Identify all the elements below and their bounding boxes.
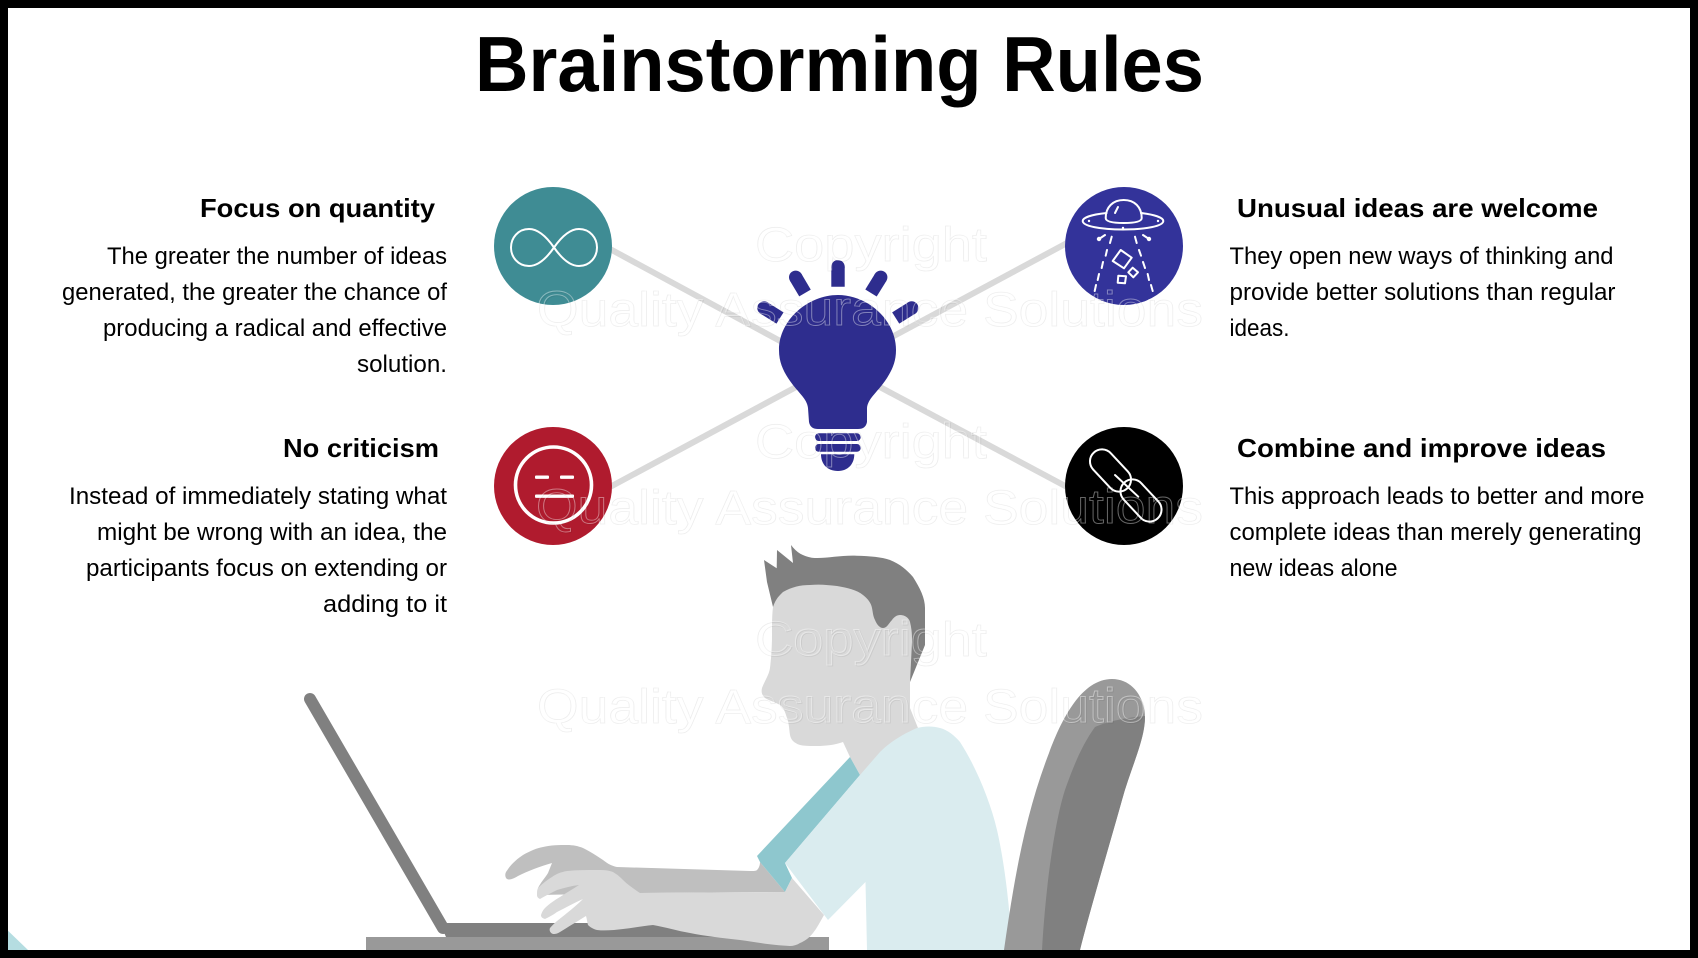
watermark	[536, 218, 1203, 734]
icon: infinity	[494, 187, 612, 305]
text block: combine and improve	[1230, 483, 1644, 582]
heading: focus on quantity: Focus on quantity	[200, 193, 436, 223]
text block: unusual ideas: provide better solutions than regular	[1230, 279, 1616, 306]
heading: no criticism: No criticism	[283, 433, 439, 463]
text block: focus on quantity: solution.	[357, 351, 447, 378]
text block: no criticism: might be wrong with an idea, the	[97, 519, 447, 546]
watermark: Quality Assurance Solutions	[536, 481, 1202, 534]
text block: combine and improve: This approach leads to better and more	[1230, 483, 1644, 510]
desk	[366, 937, 829, 950]
watermark: Copyright	[755, 416, 987, 469]
text block: no criticism: participants focus on extending or	[86, 555, 447, 582]
collar	[757, 757, 860, 892]
panel: combine and improve	[1230, 433, 1644, 582]
connector lines	[610, 243, 1067, 487]
watermark: Quality Assurance Solutions	[536, 680, 1202, 733]
panel: no criticism	[69, 433, 447, 618]
text block: focus on quantity: generated, the greater the chance of	[62, 279, 447, 306]
icon: chain link	[1065, 427, 1183, 545]
watermark: Copyright	[755, 614, 987, 667]
text block: focus on quantity	[62, 243, 447, 378]
illustration: person at laptop	[310, 545, 1145, 950]
text block: combine and improve: complete ideas than merely generating	[1230, 519, 1642, 546]
watermark: Quality Assurance Solutions	[537, 284, 1203, 337]
corner accent	[8, 931, 28, 950]
watermark: Quality Assurance Solutions	[537, 681, 1203, 734]
text block: combine and improve: new ideas alone	[1230, 555, 1398, 582]
shirt	[785, 726, 1012, 950]
watermark: Quality Assurance Solutions	[536, 283, 1202, 336]
watermark: Copyright	[754, 613, 986, 666]
panel: focus on quantity	[62, 193, 447, 378]
heading: combine and improve: Combine and improve ideas	[1237, 433, 1606, 463]
watermark: Copyright	[754, 415, 986, 468]
hair	[764, 545, 925, 682]
text block: unusual ideas: ideas.	[1230, 315, 1290, 342]
text block: unusual ideas	[1230, 243, 1616, 342]
face and neck	[762, 585, 925, 775]
text block: no criticism: adding to it	[323, 591, 447, 618]
watermark: Copyright	[755, 219, 987, 272]
panel: unusual ideas	[1230, 193, 1616, 342]
back arm	[505, 845, 785, 895]
chair	[1004, 679, 1145, 950]
text block: no criticism: Instead of immediately stating what	[69, 483, 447, 510]
watermark: Copyright	[754, 218, 986, 271]
watermark: Quality Assurance Solutions	[537, 482, 1203, 535]
front arm and hand	[537, 870, 824, 946]
heading: unusual ideas: Unusual ideas are welcome	[1237, 193, 1598, 223]
text block: focus on quantity: The greater the number of ideas	[107, 243, 447, 270]
icon: neutral face	[494, 427, 612, 545]
title: Brainstorming Rules	[475, 20, 1204, 108]
text block: focus on quantity: producing a radical and effective	[103, 315, 447, 342]
icon: ufo	[1065, 187, 1183, 305]
icon: light bulb	[757, 260, 918, 471]
laptop	[310, 699, 790, 937]
text block: no criticism	[69, 483, 447, 618]
text block: unusual ideas: They open new ways of thinking and	[1230, 243, 1614, 270]
